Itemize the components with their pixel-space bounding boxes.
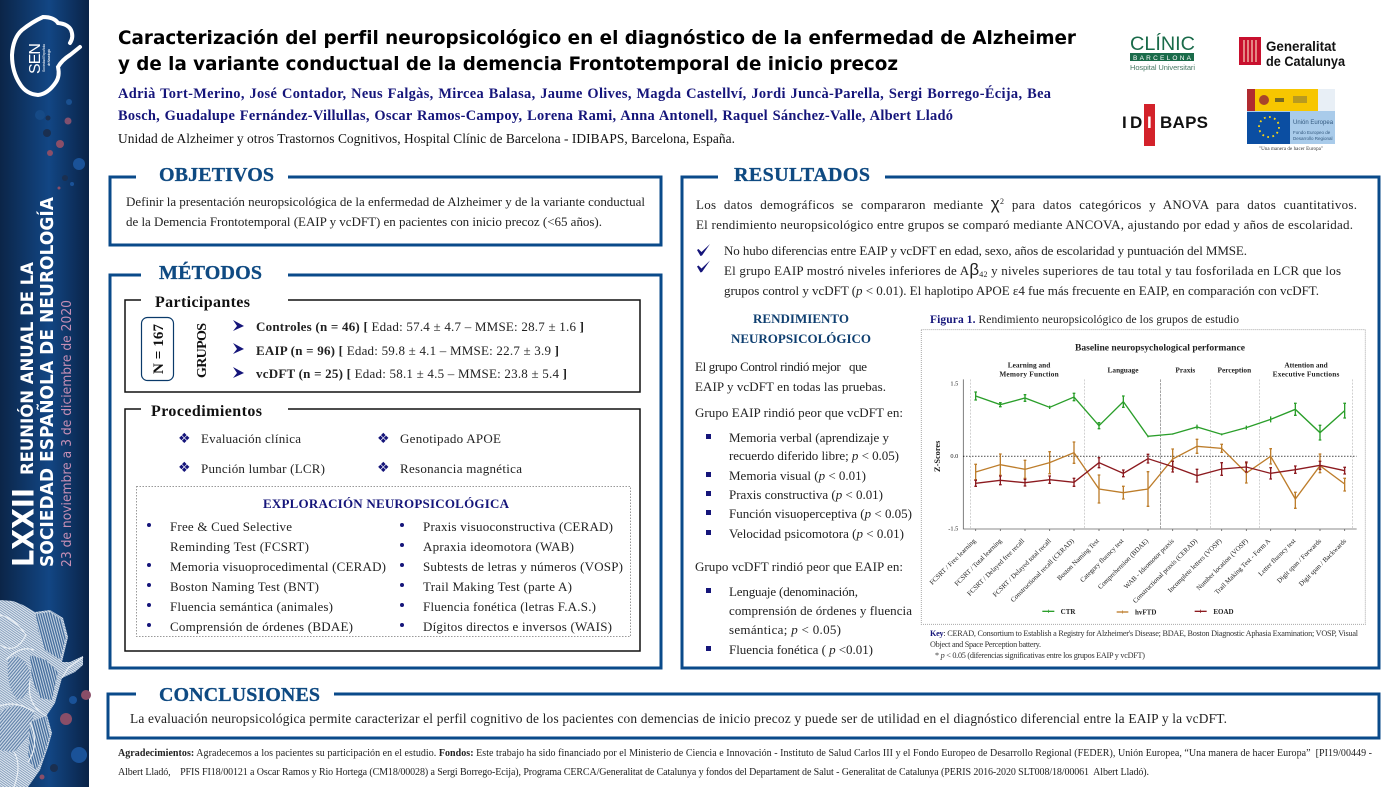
logo: IDIBAPS: BAPS bbox=[1160, 113, 1208, 132]
list: left tests: Memoria visuoprocedimental (CERAD) bbox=[170, 559, 386, 574]
axes: -1.5 bbox=[948, 525, 958, 532]
chart title: Baseline neuropsychological performance bbox=[1075, 344, 1245, 354]
logo: IDIBAPS bbox=[1122, 104, 1208, 146]
heading: rendimiento neuropsicológico: NEUROPSICOLÓGICO bbox=[731, 331, 871, 346]
list: procedures: ❖ bbox=[178, 460, 191, 476]
list: right tests: Praxis visuoconstructiva (CERAD) bbox=[423, 519, 613, 534]
text: neuropsychological performance: comprensión de órdenes y fluencia bbox=[729, 603, 912, 618]
list: procedures: Genotipado APOE bbox=[400, 431, 501, 446]
series: CTR bbox=[974, 392, 1346, 440]
brain illustration bbox=[0, 600, 83, 787]
chart key: Key: CERAD, Consortium to Establish a Registry for Alzheimer's Disease; BDAE, Boston Diagnostic Aphasia Examination; VOSP, Visual bbox=[930, 629, 1359, 638]
domain labels: Memory Function bbox=[999, 370, 1059, 379]
list: right tests: Fluencia fonética (letras F.A.S.) bbox=[423, 599, 596, 614]
text: statistical methods: para datos categóricos y ANOVA para datos cuantitativos. bbox=[1004, 197, 1357, 212]
text: neuropsychological performance: Velocidad psicomotora (p < 0.01) bbox=[729, 526, 904, 541]
heading: procedimientos: Procedimientos bbox=[151, 403, 262, 420]
text: neuropsychological performance bbox=[695, 359, 912, 657]
list: key demographic results: y niveles superiores de tau total y tau fosforilada en LCR que los bbox=[988, 263, 1341, 278]
list: left tests bbox=[147, 519, 386, 634]
x axis test labels: FCSRT / Free learning bbox=[929, 537, 978, 586]
logo: Generalitat de Catalunya: de Catalunya bbox=[1266, 53, 1345, 69]
domain labels: Executive Functions bbox=[1273, 370, 1339, 379]
x axis test labels: FCSRT / Delayed free recall bbox=[966, 538, 1026, 598]
list: procedures: ❖ bbox=[377, 460, 390, 476]
domain labels: Perception bbox=[1218, 365, 1251, 374]
panel: objetivos bbox=[110, 164, 661, 245]
text: statistical methods bbox=[696, 194, 1357, 232]
logo: Generalitat de Catalunya: Generalitat bbox=[1266, 38, 1336, 54]
list: key demographic results: grupos control y vcDFT (p < 0.01). El haplotipo APOE ε4 fue más frecuente en EAIP, en comparación con vcDFT. bbox=[724, 283, 1319, 298]
text: neuropsychological performance: Memoria verbal (aprendizaje y bbox=[729, 430, 890, 445]
chart key: Object and Space Perception battery. bbox=[930, 640, 1041, 649]
list: procedures: Resonancia magnética bbox=[400, 461, 522, 476]
x axis test labels bbox=[929, 537, 1348, 605]
legend: EOAD bbox=[1213, 608, 1234, 616]
x axis test labels: Comprehension (BDAE) bbox=[1097, 538, 1150, 591]
logo: Generalitat de Catalunya bbox=[1239, 37, 1345, 69]
heading: rendimiento neuropsicológico bbox=[731, 311, 871, 346]
x axis test labels: Boston Naming Test bbox=[1056, 538, 1101, 582]
list: key demographic results: No hubo diferencias entre EAIP y vcDFT en edad, sexo, años de escolaridad y puntuación del MMSE. bbox=[724, 243, 1247, 258]
text: objetivos: Definir la presentación neuropsicológica de la enfermedad de Alzheimer y de la variante conductual bbox=[126, 194, 645, 209]
text: objetivos bbox=[126, 194, 645, 229]
logo: SEN: Sociedad Española bbox=[42, 44, 46, 72]
logo: Clínic Barcelona bbox=[1130, 34, 1195, 72]
list: right tests: Dígitos directos e inversos (WAIS) bbox=[423, 619, 612, 634]
domain labels: Praxis bbox=[1175, 365, 1195, 374]
list: key demographic results: El grupo EAIP mostró niveles inferiores de Aβ bbox=[724, 260, 979, 279]
line chart: baseline neuropsychological performance bbox=[920, 329, 1366, 625]
list: key demographic results bbox=[697, 243, 1341, 298]
list: group statistics bbox=[233, 319, 584, 381]
text: neuropsychological performance: Fluencia fonética ( p <0.01) bbox=[729, 642, 873, 657]
list: procedures: Punción lumbar (LCR) bbox=[201, 461, 325, 476]
axes bbox=[933, 379, 1357, 532]
congress title: LXXII bbox=[6, 488, 40, 567]
legend: CTR bbox=[1061, 608, 1076, 616]
x axis test labels: Trail Making Test - Form A bbox=[1214, 538, 1272, 596]
domain labels: Learning and bbox=[1008, 360, 1050, 369]
list: procedures: Evaluación clínica bbox=[201, 431, 301, 446]
logo: European and Spanish funding: Fondo Europeo de bbox=[1293, 130, 1331, 135]
text: statistical methods: 2 bbox=[1000, 197, 1004, 206]
x axis test labels: FCSRT / Delayed total recall bbox=[992, 538, 1053, 599]
list: left tests: Fluencia semántica (animales) bbox=[170, 599, 333, 614]
list: group statistics: Controles (n = 46) [ Edad: 57.4 ± 4.7 – MMSE: 28.7 ± 1.6 ] bbox=[256, 319, 584, 334]
title bbox=[118, 27, 1077, 75]
congress title: SOCIEDAD ESPAÑOLA DE NEUROLOGÍA bbox=[35, 197, 58, 567]
heading: métodos: MÉTODOS bbox=[159, 261, 262, 284]
list: procedures bbox=[178, 431, 522, 476]
list: right tests: Subtests de letras y números (VOSP) bbox=[423, 559, 623, 574]
heading: conclusiones: CONCLUSIONES bbox=[159, 684, 320, 706]
panel: exploración neuropsicológica bbox=[136, 486, 630, 636]
x axis test labels: Letter fluency test bbox=[1257, 538, 1297, 578]
x axis test labels: WAB - Ideomotor praxis bbox=[1123, 538, 1176, 591]
logo: IDIBAPS: I bbox=[1147, 113, 1152, 132]
domain labels: Language bbox=[1108, 365, 1139, 374]
domain labels bbox=[999, 360, 1339, 379]
text: neuropsychological performance: recuerdo diferido libre; p < 0.05) bbox=[729, 448, 899, 463]
logo: European and Spanish funding: Desarrollo Regional bbox=[1293, 136, 1333, 141]
text: conclusion: La evaluación neuropsicológica permite caracterizar el perfil cognitivo de los pacientes con demencias de inicio precoz y puede ser de utilidad en el diagnóstico diferencial entre la EAIP y la vcDFT. bbox=[130, 711, 1227, 726]
list: group statistics: vcDFT (n = 25) [ Edad: 58.1 ± 4.5 – MMSE: 23.8 ± 5.4 ] bbox=[256, 366, 567, 381]
x axis test labels: Category fluency test bbox=[1079, 538, 1125, 584]
logo: SEN: de Neurología bbox=[47, 49, 51, 66]
logo: Clínic Barcelona: BARCELONA bbox=[1133, 55, 1192, 62]
x axis test labels: Digit span / Forwards bbox=[1276, 538, 1323, 585]
x axis test labels: Constructional recall (CERAD) bbox=[1010, 538, 1076, 604]
badge: N = 167 bbox=[142, 318, 174, 380]
heading: rendimiento neuropsicológico: RENDIMIENTO bbox=[753, 311, 849, 326]
congress title bbox=[6, 197, 75, 567]
title: Caracterización del perfil neuropsicológico en el diagnóstico de la enfermedad de Alzheimer bbox=[118, 27, 1077, 49]
congress title: 23 de noviembre a 3 de diciembre de 2020 bbox=[60, 300, 75, 567]
x axis test labels: FCSRT / Total learning bbox=[954, 537, 1004, 588]
panel: participantes bbox=[125, 294, 640, 392]
logo: European and Spanish funding: "Una manera de hacer Europa" bbox=[1259, 147, 1323, 152]
authors bbox=[118, 85, 1051, 124]
authors: Adrià Tort-Merino, José Contador, Neus Falgàs, Mircea Balasa, Jaume Olives, Magda Castellví, Jordi Juncà-Parella, Sergi Borrego-Écija, Bea bbox=[118, 85, 1051, 102]
list: procedures: ❖ bbox=[377, 431, 390, 447]
panel: resultados bbox=[682, 164, 1379, 668]
list: left tests: Comprensión de órdenes (BDAE) bbox=[170, 619, 353, 634]
text: neuropsychological performance: semántica; p < 0.05) bbox=[729, 622, 841, 637]
list: procedures: ❖ bbox=[178, 431, 191, 447]
series: hvFTD bbox=[974, 439, 1346, 508]
list: right tests: Apraxia ideomotora (WAB) bbox=[423, 539, 574, 554]
acknowledgements bbox=[118, 748, 1372, 778]
legend: hvFTD bbox=[1135, 609, 1156, 617]
heading: objetivos: OBJETIVOS bbox=[159, 164, 274, 186]
logo: IDIBAPS: D bbox=[1130, 113, 1142, 132]
logo: IDIBAPS: I bbox=[1122, 113, 1127, 132]
chart key bbox=[930, 629, 1359, 660]
legend bbox=[1042, 608, 1234, 617]
text: neuropsychological performance: EAIP y vcDFT en todas las pruebas. bbox=[695, 379, 886, 394]
domain labels: Attention and bbox=[1284, 360, 1328, 369]
logo: European and Spanish funding bbox=[1247, 89, 1335, 152]
logo: SEN bbox=[12, 17, 80, 95]
congress title: REUNIÓN ANUAL DE LA bbox=[18, 262, 37, 475]
decorative dots bottom bbox=[40, 690, 91, 780]
chart key: * p < 0.05 (diferencias significativas entre los grupos EAIP y vcDFT) bbox=[935, 651, 1145, 660]
affiliation: Unidad de Alzheimer y otros Trastornos Cognitivos, Hospital Clínic de Barcelona - IDIBAPS, Barcelona, España. bbox=[118, 131, 735, 146]
heading: exploración: EXPLORACIÓN NEUROPSICOLÓGICA bbox=[263, 496, 510, 511]
axes: 0.0 bbox=[950, 453, 958, 460]
text: neuropsychological performance: Memoria visual (p < 0.01) bbox=[729, 468, 866, 483]
badge: N = 167: N = 167 bbox=[151, 324, 167, 374]
text: neuropsychological performance: Función visuoperceptiva (p < 0.05) bbox=[729, 506, 912, 521]
text: objetivos: de la Demencia Frontotemporal (EAIP y vcDFT) en pacientes con inicio precoz (<65 años). bbox=[126, 214, 602, 229]
x axis test labels: Incomplete letters (VOSP) bbox=[1167, 538, 1223, 594]
acknowledgements: Albert Lladó, PFIS FI18/00121 a Oscar Ramos y Rio Hortega (CM18/00028) a Sergi Borrego-Ecija), Programa CERCA/Generalitat de Catalunya y fondos del Departament de Salut - Generalitat de Catalunya (PERIS 2016-2020 SLT008/18/00061 Albert Lladó). bbox=[118, 767, 1149, 778]
list: left tests: Reminding Test (FCSRT) bbox=[170, 539, 309, 554]
logo: Clínic Barcelona: CLÍNIC bbox=[1130, 34, 1195, 55]
panel: métodos bbox=[110, 261, 661, 668]
axes: Z-Scores bbox=[933, 440, 942, 472]
series: EOAD bbox=[974, 454, 1346, 486]
logo: SEN: SEN bbox=[27, 43, 44, 74]
domain dividers bbox=[970, 379, 1353, 528]
list: left tests: Free & Cued Selective bbox=[170, 519, 292, 534]
list: key demographic results: 42 bbox=[979, 270, 987, 279]
panel: procedimientos bbox=[125, 403, 640, 651]
label: grupos: GRUPOS bbox=[195, 323, 210, 378]
text: statistical methods: Los datos demográficos se compararon mediante χ bbox=[696, 194, 1000, 213]
authors: Bosch, Guadalupe Fernández-Villullas, Oscar Ramos-Campoy, Lorena Rami, Anna Antonell, Raquel Sánchez-Valle, Albert Lladó bbox=[118, 108, 953, 124]
text: neuropsychological performance: Lenguaje (denominación, bbox=[729, 584, 858, 599]
text: neuropsychological performance: Grupo vcDFT rindió peor que EAIP en: bbox=[695, 559, 903, 574]
figure caption: Figura 1. Rendimiento neuropsicológico de los grupos de estudio bbox=[930, 314, 1239, 326]
logo: Clínic Barcelona: Hospital Universitari bbox=[1130, 63, 1195, 72]
text: neuropsychological performance: Grupo EAIP rindió peor que vcDFT en: bbox=[695, 405, 903, 420]
list: group statistics: EAIP (n = 96) [ Edad: 59.8 ± 4.1 – MMSE: 22.7 ± 3.9 ] bbox=[256, 343, 559, 358]
sidebar: congress banner bbox=[0, 0, 91, 787]
x axis test labels: Digit span / Backwards bbox=[1298, 538, 1348, 588]
x axis test labels: Constructional praxis (CERAD) bbox=[1132, 538, 1199, 605]
text: statistical methods: El rendimiento neuropsicológico entre grupos se comparó mediante ANCOVA, ajustando por edad y años de escolaridad. bbox=[696, 217, 1353, 232]
text: neuropsychological performance: Praxis constructiva (p < 0.01) bbox=[729, 487, 883, 502]
heading: resultados: RESULTADOS bbox=[734, 164, 870, 186]
logo: European and Spanish funding: Unión Europea bbox=[1293, 120, 1334, 126]
list: right tests bbox=[400, 519, 623, 634]
heading: participantes: Participantes bbox=[155, 294, 250, 311]
title: y de la variante conductual de la demencia Frontotemporal de inicio precoz bbox=[118, 53, 898, 75]
x axis test labels: Number location (VOSP) bbox=[1195, 538, 1250, 592]
axes: 1.5 bbox=[950, 380, 958, 387]
list: right tests: Trail Making Test (parte A) bbox=[423, 579, 572, 594]
list: left tests: Boston Naming Test (BNT) bbox=[170, 579, 319, 594]
decorative dots top bbox=[35, 99, 85, 190]
text: neuropsychological performance: El grupo Control rindió mejor que bbox=[695, 359, 867, 374]
acknowledgements: Agradecimientos: Agradecemos a los pacientes su participación en el estudio. Fondos: Este trabajo ha sido financiado por el Ministerio de Ciencia e Innovación - Instituto de Salud Carlos III y el Fondo Europeo de Desarrollo Regional (FEDER), Unión Europea, “Una manera de hacer Europa” [PI19/00449 - bbox=[118, 748, 1372, 759]
panel: conclusiones bbox=[108, 684, 1379, 738]
